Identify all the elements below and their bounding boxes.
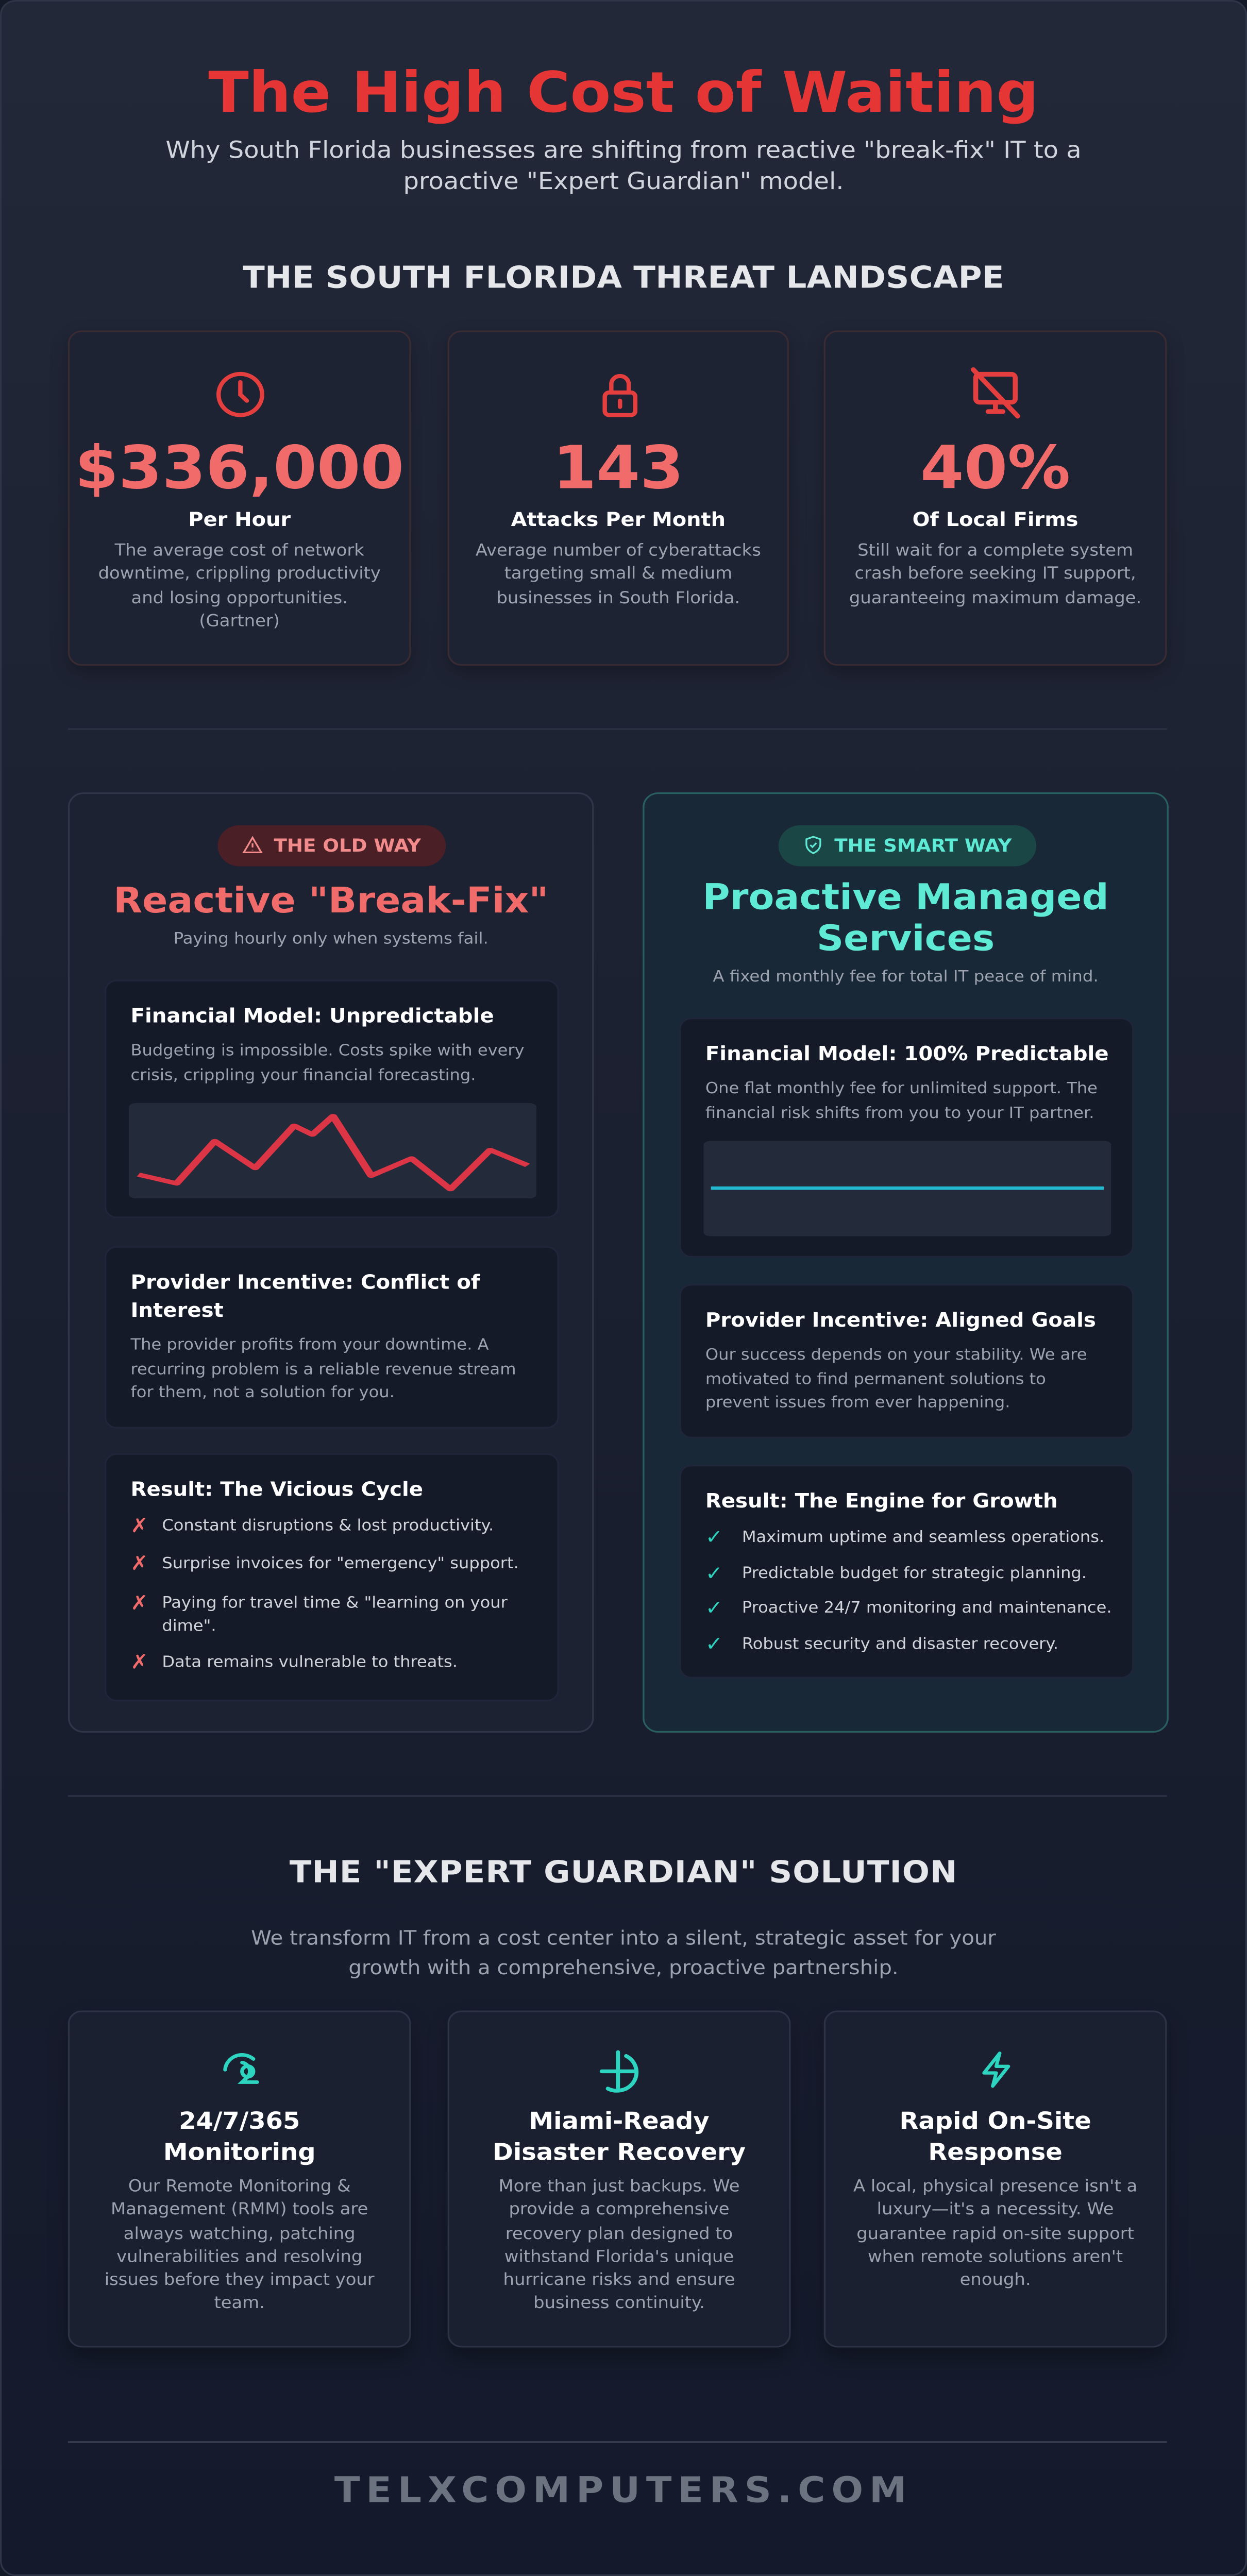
section heading: threat landscape: THE SOUTH FLORIDA THREAT LANDSCAPE: [243, 261, 1004, 296]
card: vicious cycle: Paying for travel time & "learning on your: [162, 1595, 508, 1613]
chart: volatile costs: [129, 1103, 536, 1198]
badge: smart way: THE SMART WAY: [834, 835, 1012, 856]
card: aligned goals: Our success depends on your stability. We are: [705, 1346, 1087, 1364]
solution card: monitoring: [68, 2010, 411, 2347]
heading: proactive: Proactive Managed: [702, 878, 1109, 919]
card: conflict of interest: for them, not a solution for you.: [130, 1384, 395, 1402]
card: aligned goals: Provider Incentive: Aligned Goals: [705, 1309, 1096, 1332]
panel: old way: [68, 792, 594, 1733]
badge: smart way: [779, 825, 1036, 867]
card: engine for growth: Predictable budget for strategic planning.: [742, 1565, 1087, 1583]
card: financial model unpredictable: Financial Model: Unpredictable: [130, 1005, 494, 1027]
solution card: rapid response: Rapid On-Site: [899, 2109, 1091, 2136]
solution card: monitoring: Management (RMM) tools are: [111, 2201, 368, 2220]
intro text: growth with a comprehensive, proactive partnership.: [348, 1955, 899, 1978]
solution card: disaster recovery: withstand Florida's unique: [504, 2249, 734, 2267]
card: vicious cycle: [105, 1453, 559, 1701]
stat card: attacks: Attacks Per Month: [511, 508, 726, 531]
solution card: monitoring: Monitoring: [163, 2140, 316, 2166]
heading: reactive: Reactive "Break-Fix": [113, 881, 548, 922]
stat card: local firms: [824, 330, 1167, 666]
icon: anchor/recovery: [600, 2050, 639, 2093]
card: conflict of interest: The provider profits from your downtime. A: [130, 1336, 489, 1354]
card: engine for growth: ✓: [705, 1596, 723, 1619]
chart: flat costs: [704, 1141, 1111, 1236]
solution card: disaster recovery: More than just backups. We: [499, 2178, 740, 2196]
card: financial predictable: Financial Model: 100% Predictable: [705, 1042, 1109, 1065]
icon: lock: [602, 374, 638, 417]
card: engine for growth: Maximum uptime and seamless operations.: [742, 1529, 1104, 1547]
card: vicious cycle: ✗: [130, 1651, 148, 1673]
card: engine for growth: ✓: [705, 1526, 723, 1549]
stat card: cost per hour: $336,000: [75, 436, 404, 503]
solution card: disaster recovery: business continuity.: [533, 2296, 705, 2314]
card: vicious cycle: dime".: [162, 1618, 216, 1636]
stat card: local firms: 40%: [920, 436, 1070, 503]
panel: smart way: A fixed monthly fee for total IT peace of mind.: [713, 968, 1099, 986]
stat card: attacks: businesses in South Florida.: [496, 589, 740, 607]
card: conflict of interest: [105, 1246, 559, 1429]
card: vicious cycle: ✗: [130, 1552, 148, 1575]
subtitle: Why South Florida businesses are shifting from reactive "break-fix" IT to a: [165, 138, 1082, 164]
stat card: attacks: targeting small & medium: [504, 566, 732, 584]
solution card: rapid response: luxury—it's a necessity. We: [877, 2201, 1114, 2220]
stat card: local firms: Of Local Firms: [913, 508, 1079, 531]
stat card: cost per hour: (Gartner): [199, 613, 280, 631]
badge: old way: [217, 825, 446, 867]
solution card: disaster recovery: [448, 2010, 790, 2347]
panel: smart way: [643, 792, 1169, 1733]
solution card: rapid response: guarantee rapid on-site support: [856, 2225, 1134, 2243]
stat card: local firms: Still wait for a complete system: [857, 543, 1133, 561]
card: vicious cycle: Data remains vulnerable to threats.: [162, 1654, 458, 1672]
card: financial model unpredictable: Budgeting is impossible. Costs spike with every: [130, 1042, 525, 1060]
card: engine for growth: Proactive 24/7 monitoring and maintenance.: [742, 1600, 1112, 1618]
stat card: cost per hour: Per Hour: [188, 508, 291, 531]
solution card: monitoring: team.: [214, 2296, 265, 2314]
section heading: expert guardian: THE "EXPERT GUARDIAN" SOLUTION: [290, 1856, 957, 1890]
card: engine for growth: ✓: [705, 1632, 723, 1655]
heading: proactive: Services: [817, 918, 995, 959]
solution card: rapid response: enough.: [960, 2272, 1031, 2290]
icon: monitor off: [971, 367, 1020, 418]
card: vicious cycle: ✗: [130, 1514, 148, 1537]
solution card: monitoring: always watching, patching: [124, 2225, 356, 2243]
card: financial predictable: One flat monthly fee for unlimited support. The: [705, 1080, 1098, 1098]
solution card: rapid response: when remote solutions aren't: [868, 2249, 1123, 2267]
intro text: [251, 1927, 996, 1978]
intro text: We transform IT from a cost center into a silent, strategic asset for your: [251, 1927, 996, 1950]
card: aligned goals: motivated to find permanent solutions to: [705, 1370, 1046, 1388]
card: engine for growth: [679, 1465, 1134, 1679]
card: financial model unpredictable: crisis, crippling your financial forecasting.: [130, 1066, 476, 1084]
card: financial predictable: financial risk shifts from you to your IT partner.: [705, 1104, 1094, 1122]
solution card: monitoring: Our Remote Monitoring &: [128, 2178, 351, 2196]
icon: clock: [216, 372, 264, 417]
stat card: attacks: Average number of cyberattacks: [476, 543, 761, 561]
card: vicious cycle: Surprise invoices for "emergency" support.: [162, 1555, 519, 1573]
panel: old way: Paying hourly only when systems fail.: [174, 930, 488, 948]
solution card: monitoring: issues before they impact your: [105, 2272, 375, 2290]
stat card: cost per hour: downtime, crippling productivity: [98, 566, 381, 584]
card: financial predictable: [679, 1018, 1134, 1258]
card: conflict of interest: recurring problem is a reliable revenue stream: [130, 1361, 516, 1379]
solution card: disaster recovery: Miami-Ready: [529, 2109, 710, 2136]
icon: monitoring: [223, 2053, 259, 2084]
card: engine for growth: Result: The Engine for Growth: [705, 1489, 1058, 1513]
solution card: monitoring: vulnerabilities and resolving: [116, 2249, 362, 2267]
subtitle: [165, 138, 1082, 196]
solution card: disaster recovery: Disaster Recovery: [493, 2140, 746, 2166]
solution card: disaster recovery: provide a comprehensive: [509, 2201, 730, 2220]
card: vicious cycle: Result: The Vicious Cycle: [130, 1478, 423, 1501]
stat card: local firms: crash before seeking IT support,: [855, 566, 1136, 584]
solution card: disaster recovery: hurricane risks and ensure: [503, 2272, 735, 2290]
icon: lightning: [982, 2052, 1010, 2088]
badge: old way: THE OLD WAY: [274, 835, 421, 856]
card: aligned goals: [679, 1284, 1134, 1438]
solution card: rapid response: Response: [928, 2140, 1063, 2166]
solution card: disaster recovery: recovery plan designed to: [505, 2225, 733, 2243]
card: vicious cycle: ✗: [130, 1591, 148, 1614]
solution card: rapid response: [824, 2010, 1167, 2347]
stat card: local firms: guaranteeing maximum damage.: [849, 589, 1141, 607]
solution card: rapid response: A local, physical presence isn't a: [853, 2178, 1137, 2196]
stat card: cost per hour: and losing opportunities.: [131, 589, 348, 607]
card: aligned goals: prevent issues from ever happening.: [705, 1394, 1010, 1413]
subtitle: proactive "Expert Guardian" model.: [403, 170, 844, 196]
stat card: cost per hour: [68, 330, 411, 666]
card: vicious cycle: Constant disruptions & lost productivity.: [162, 1517, 494, 1535]
card: conflict of interest: Provider Incentive: Conflict of: [130, 1270, 480, 1294]
stat card: cost per hour: The average cost of network: [115, 543, 364, 561]
stat card: attacks: 143: [553, 436, 684, 503]
card: engine for growth: ✓: [705, 1562, 723, 1585]
card: engine for growth: Robust security and disaster recovery.: [742, 1636, 1058, 1654]
title: The High Cost of Waiting: [208, 61, 1039, 127]
card: conflict of interest: Interest: [130, 1299, 224, 1321]
stat card: attacks: [448, 330, 789, 666]
footer: website: TELXCOMPUTERS.COM: [334, 2471, 913, 2512]
heading: proactive: [702, 878, 1109, 959]
solution card: monitoring: 24/7/365: [179, 2109, 300, 2136]
card: financial model unpredictable: [105, 980, 559, 1218]
